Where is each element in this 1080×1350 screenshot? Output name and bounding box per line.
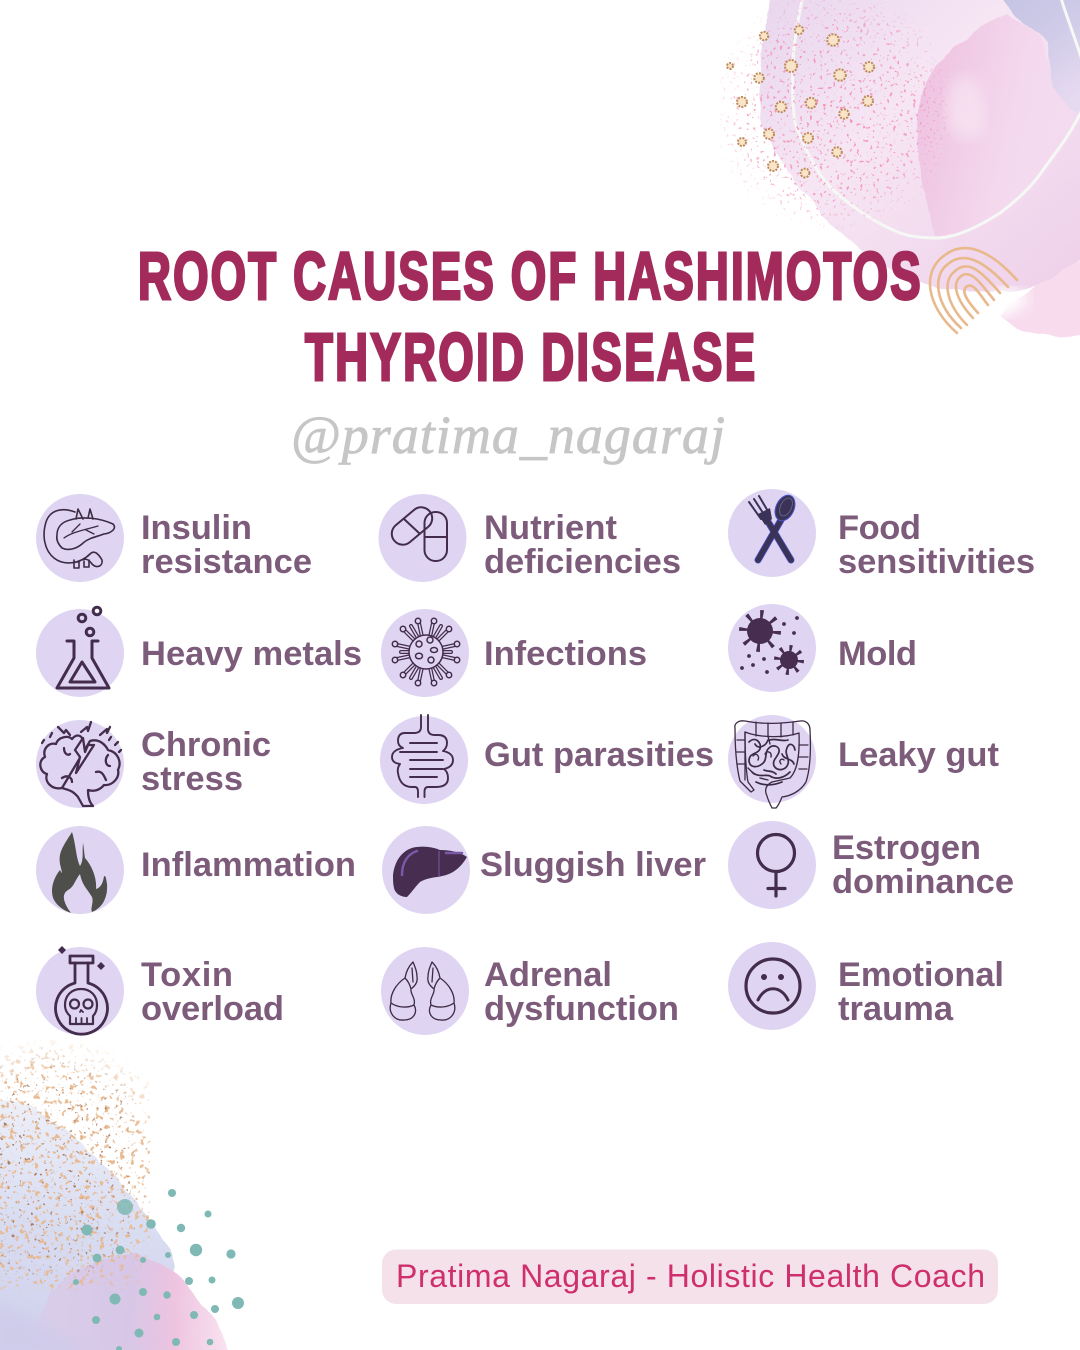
icon: female symbol <box>728 821 816 909</box>
item: Inflammation <box>36 826 356 914</box>
icon: fork and spoon <box>728 489 816 577</box>
label: Mold <box>838 635 917 673</box>
label: Estrogen <box>832 829 981 867</box>
footer badge <box>382 1250 998 1304</box>
item: Nutrient deficiencies <box>378 494 681 582</box>
teal dots: bottom left <box>73 1189 244 1350</box>
label: Inflammation <box>141 846 356 884</box>
item: Chronic stress <box>36 720 271 808</box>
item: Emotional trauma <box>728 942 1004 1030</box>
icon: mold spores <box>728 604 816 692</box>
watercolor decoration: top right <box>720 0 1080 337</box>
title <box>138 239 921 395</box>
label: Leaky gut <box>838 736 1000 774</box>
item: Infections <box>381 609 647 697</box>
item: Sluggish liver <box>382 826 706 914</box>
icon: pancreas <box>36 494 124 582</box>
gold glitter specks: bottom left <box>0 1030 150 1290</box>
label <box>838 509 1035 581</box>
label: Chronic <box>141 726 271 764</box>
label <box>484 956 679 1028</box>
label <box>838 956 1004 1028</box>
item: Adrenal dysfunction <box>381 947 679 1035</box>
label <box>141 726 271 798</box>
footer text: Pratima Nagaraj - Holistic Health Coach <box>396 1258 985 1294</box>
label: Heavy metals <box>141 635 362 673</box>
handle: @pratima_nagaraj <box>291 405 725 465</box>
gold glitter dots: top right <box>727 26 874 177</box>
icon: adrenal glands and kidneys <box>381 947 469 1035</box>
label: overload <box>141 990 284 1028</box>
item: Estrogen dominance <box>728 821 1014 909</box>
item: Gut parasities <box>380 715 714 804</box>
label: Insulin <box>141 509 252 547</box>
icon: sad face <box>728 942 816 1030</box>
label: Adrenal <box>484 956 612 994</box>
label: Emotional <box>838 956 1004 994</box>
item: Insulin resistance <box>36 494 312 582</box>
pink glitter specks <box>720 0 950 240</box>
label: dysfunction <box>484 990 679 1028</box>
item: Food sensitivities <box>728 489 1035 581</box>
label <box>484 509 681 581</box>
item: Heavy metals <box>36 607 362 697</box>
label <box>141 956 284 1028</box>
watercolor decoration: bottom left <box>0 1098 232 1350</box>
label: Nutrient <box>484 509 618 547</box>
label: resistance <box>141 543 312 581</box>
icon: rose gold fingerprint arches <box>930 248 1017 333</box>
label: Food <box>838 509 921 547</box>
icon: liver <box>382 826 470 914</box>
item: Mold <box>728 604 917 692</box>
label <box>141 509 312 581</box>
label: deficiencies <box>484 543 681 581</box>
icon: intestine <box>380 715 468 804</box>
label: stress <box>141 760 243 798</box>
label: Gut parasities <box>484 736 714 774</box>
icon: small and large intestine <box>728 715 816 808</box>
item: Toxin overload <box>36 946 284 1035</box>
item: Leaky gut <box>728 715 1000 808</box>
label: Sluggish liver <box>480 846 706 884</box>
label: Infections <box>484 635 647 673</box>
icon: flask with bubbles <box>36 607 124 697</box>
label: sensitivities <box>838 543 1035 581</box>
icon: brain with lightning <box>36 720 124 808</box>
title: THYROID DISEASE <box>305 320 755 395</box>
label: dominance <box>832 863 1014 901</box>
icon: capsules <box>378 494 466 582</box>
label: Toxin <box>141 956 233 994</box>
icon: flame <box>36 826 124 914</box>
label <box>832 829 1014 901</box>
title: ROOT CAUSES OF HASHIMOTOS <box>138 239 921 314</box>
icon: virus <box>381 609 469 697</box>
icon: poison bottle with skull <box>36 946 124 1035</box>
label: trauma <box>838 990 954 1028</box>
